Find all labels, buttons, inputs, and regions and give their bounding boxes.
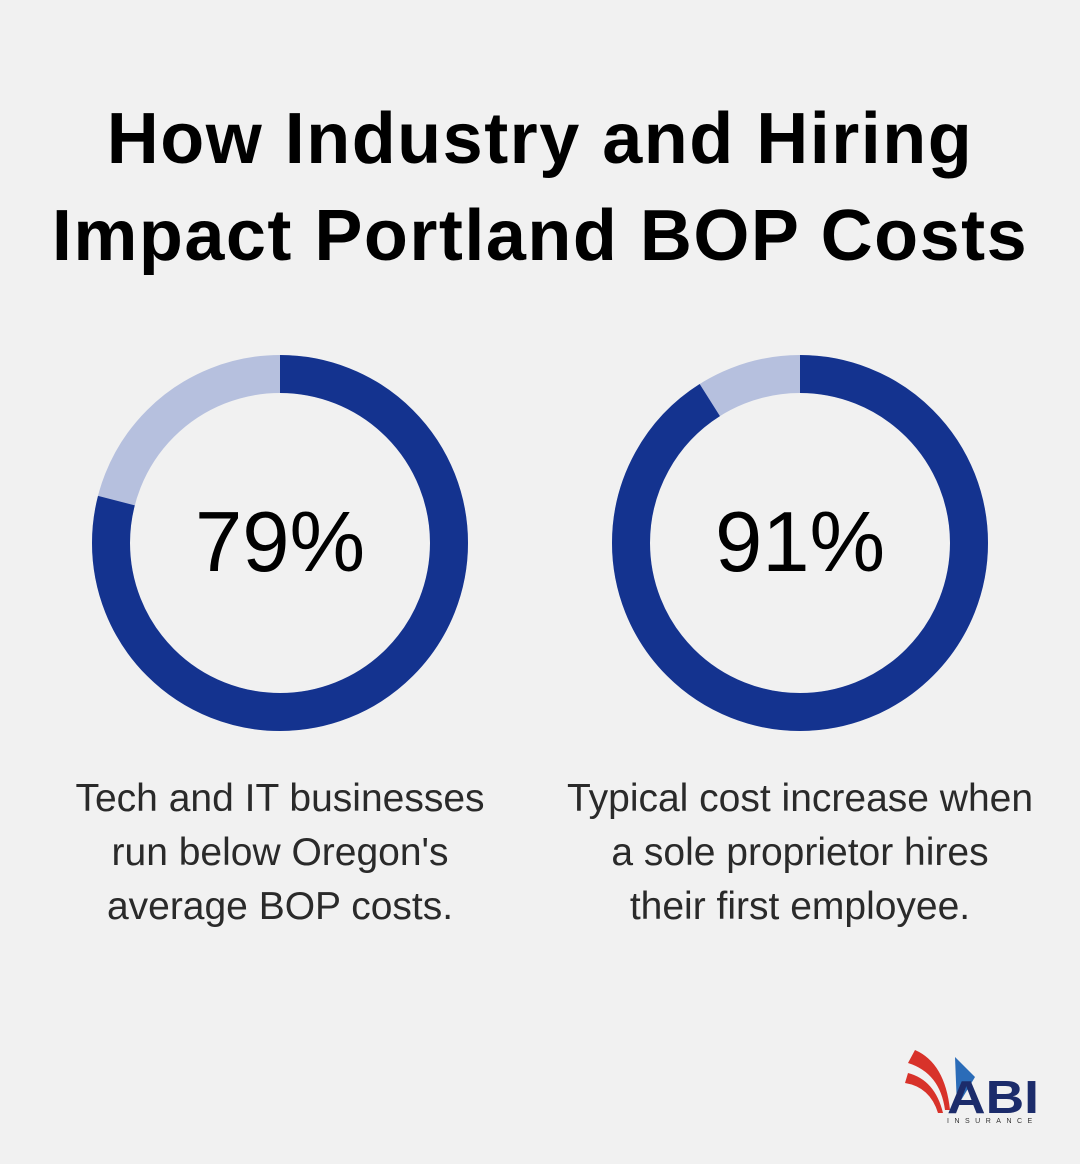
- donut: 91%: 91%: [715, 495, 885, 590]
- donut: 79%: 79%: [195, 495, 365, 590]
- donut: 79%: [92, 355, 468, 731]
- caption left: run below Oregon's: [112, 831, 448, 874]
- caption right: Typical cost increase when: [567, 777, 1033, 820]
- caption right: a sole proprietor hires: [611, 831, 989, 874]
- title: How Industry and Hiring: [107, 99, 973, 179]
- caption left: average BOP costs.: [107, 885, 453, 928]
- caption right: [567, 777, 1033, 928]
- title: Impact Portland BOP Costs: [52, 196, 1028, 276]
- logo: [905, 1050, 1039, 1125]
- logo: ABI: [947, 1071, 1039, 1123]
- logo: INSURANCE: [947, 1118, 1038, 1125]
- caption left: Tech and IT businesses: [75, 777, 485, 820]
- donut: 91%: [612, 355, 988, 731]
- title: [52, 99, 1028, 276]
- caption left: [75, 777, 485, 928]
- caption right: their first employee.: [630, 885, 970, 928]
